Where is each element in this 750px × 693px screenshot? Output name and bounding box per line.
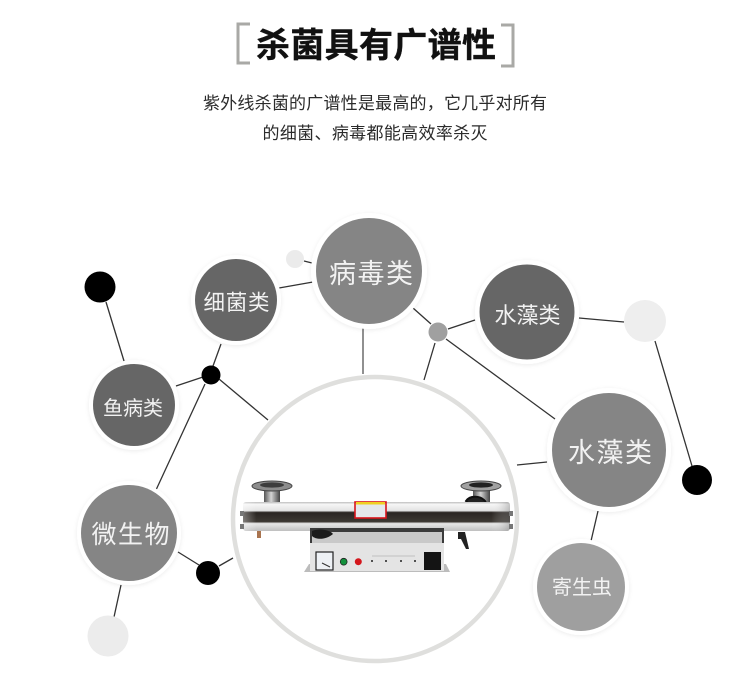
intro text [203, 94, 547, 143]
bubble: 寄生虫 [533, 539, 629, 635]
bubble: 细菌类 [191, 255, 281, 345]
bubble: 微生物: 微生物 [92, 521, 170, 549]
central circle [233, 377, 517, 661]
title [238, 24, 513, 66]
bubble: 病毒类: 病毒类 [329, 259, 413, 289]
node: pale small [286, 250, 304, 268]
intro text: 紫外线杀菌的广谱性是最高的，它几乎对所有 [203, 94, 547, 113]
node: black right [682, 465, 712, 495]
green button [340, 558, 347, 565]
right flange [461, 481, 501, 506]
bubble: 鱼病类: 鱼病类 [103, 397, 163, 420]
title text: 杀菌具有广谱性 [256, 27, 496, 65]
bubble: 微生物 [77, 481, 181, 585]
node: pale right [624, 300, 666, 342]
bubble: 寄生虫: 寄生虫 [552, 576, 612, 599]
bubble: 水藻类 lower [547, 388, 671, 512]
node: pale bottom left [88, 616, 128, 656]
bubble: 病毒类 [311, 213, 427, 329]
bubble: 水藻类 upper [475, 260, 579, 364]
node: grey junction [428, 322, 448, 342]
node: black lower left [196, 561, 220, 585]
meter [316, 552, 333, 570]
handle [458, 532, 469, 549]
product: UV steriliser [240, 481, 513, 572]
indicator lights [371, 560, 416, 562]
intro text: 的细菌、病毒都能高效率杀灭 [262, 124, 488, 143]
connector lines [106, 261, 692, 617]
bubble: 鱼病类 [89, 360, 179, 450]
node: black left junction [202, 366, 220, 384]
bubble: 水藻类 upper: 水藻类 [494, 303, 560, 328]
title left bracket [238, 24, 250, 63]
red button [355, 558, 362, 565]
warning label [355, 502, 386, 518]
bubble: 水藻类 lower: 水藻类 [568, 438, 652, 468]
title right bracket [501, 25, 513, 66]
switch [424, 552, 441, 570]
bubble: 细菌类: 细菌类 [204, 291, 270, 315]
decorative node: black top left [84, 272, 116, 302]
left flange [252, 481, 292, 504]
control box [304, 528, 450, 572]
tube [240, 502, 513, 538]
